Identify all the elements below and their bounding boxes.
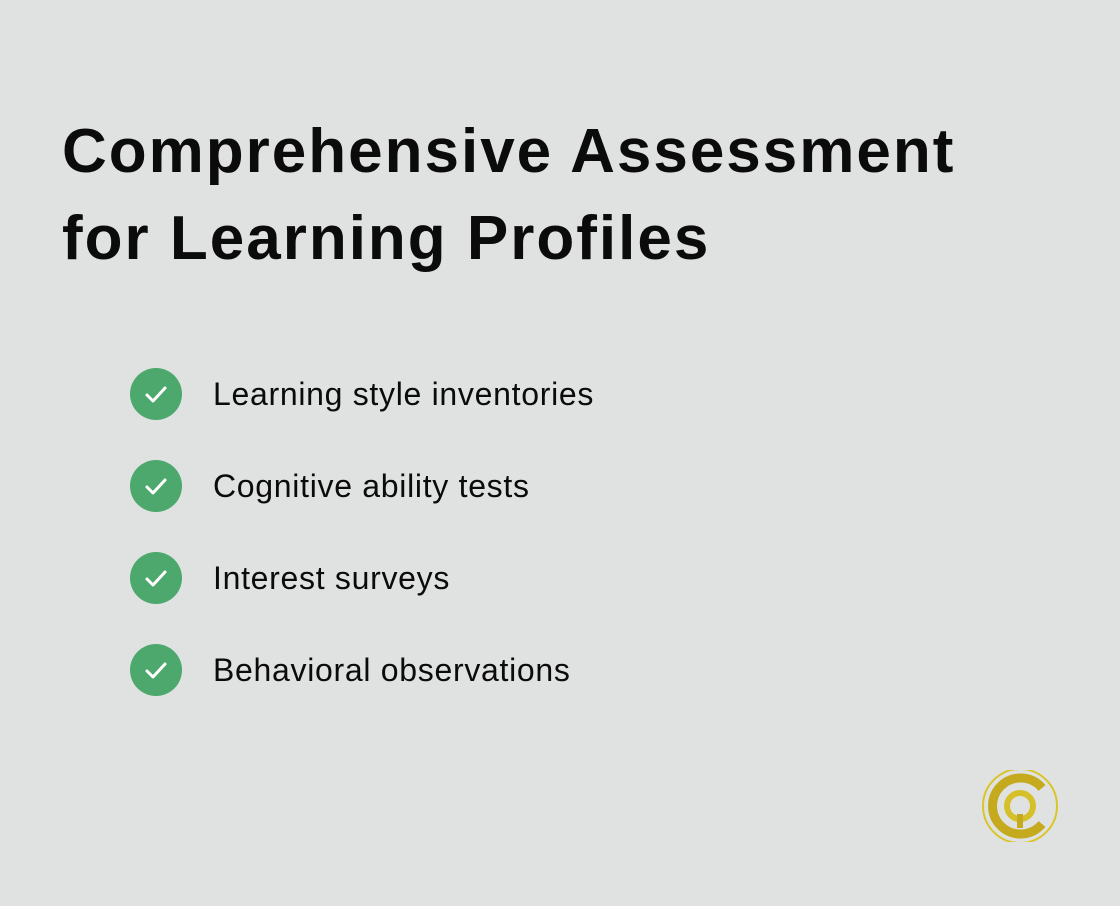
icon: check xyxy=(130,368,182,420)
item: cognitive ability tests: Cognitive ability tests xyxy=(213,468,530,504)
title: Comprehensive Assessment xyxy=(62,117,955,186)
item: interest surveys xyxy=(130,552,450,604)
icon: check xyxy=(130,460,182,512)
logo xyxy=(982,770,1058,842)
item: cognitive ability tests xyxy=(130,460,530,512)
icon: check xyxy=(130,644,182,696)
title xyxy=(62,117,955,273)
item: learning style inventories xyxy=(130,368,594,420)
icon: check xyxy=(130,552,182,604)
title: for Learning Profiles xyxy=(62,204,710,273)
item: behavioral observations: Behavioral observations xyxy=(213,652,571,688)
item: interest surveys: Interest surveys xyxy=(213,560,450,596)
item: learning style inventories: Learning style inventories xyxy=(213,376,594,412)
item: behavioral observations xyxy=(130,644,571,696)
